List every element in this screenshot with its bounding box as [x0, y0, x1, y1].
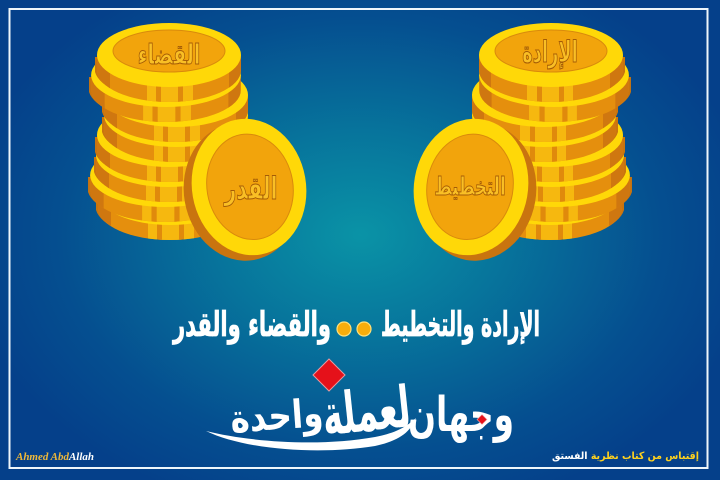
left leaning coin label: القدر: القدر: [223, 171, 278, 207]
headline right part: الإرادة والتخطيط: [381, 305, 540, 344]
headline: [172, 305, 540, 344]
left coin stack: [88, 23, 317, 270]
calligraphy title: [206, 359, 514, 450]
coin label: القضاء: القضاء: [138, 38, 200, 71]
right coin stack: [403, 23, 632, 270]
right leaning coin label: التخطيط: التخطيط: [434, 173, 506, 202]
calligraphy word: واحدة: واحدة: [229, 391, 325, 443]
red diamond: [313, 359, 345, 391]
calligraphy word: لعملة: لعملة: [319, 375, 414, 450]
credit: source: إقتباس من كتاب نظرية الفستق: [552, 451, 699, 462]
gold dots: [337, 322, 371, 336]
small red diamond: [477, 414, 487, 424]
calligraphy word: وجهان: وجهان: [408, 386, 514, 443]
credit: author: Ahmed AbdAllah: [15, 451, 94, 463]
calligraphy swoosh: [206, 418, 416, 450]
headline left part: والقضاء والقدر: [172, 305, 331, 344]
coin label: الإرادة: الإرادة: [522, 34, 578, 69]
